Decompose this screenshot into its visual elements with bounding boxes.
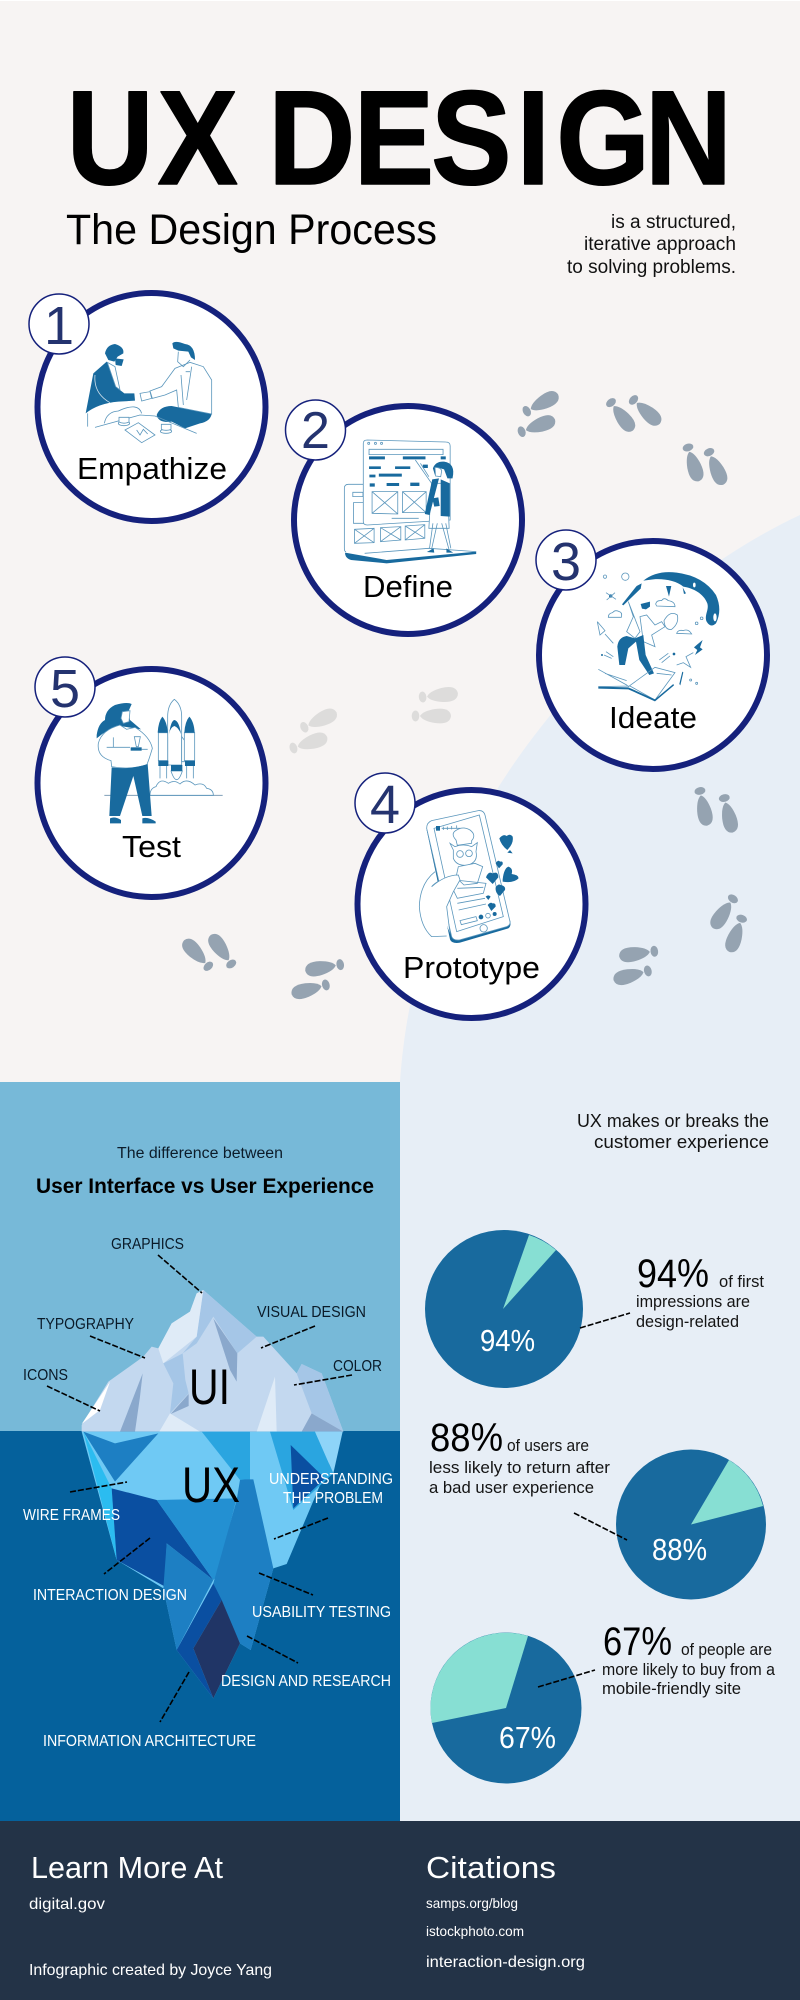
UX labels (23, 1471, 393, 1750)
title: UX DESIGN (67, 64, 732, 213)
iceberg below water (82, 1432, 343, 1698)
badge: 2: 2 (301, 402, 330, 460)
footer: learn more: Infographic created by Joyce Yang (29, 1962, 272, 1979)
heading: user interface vs user experience: User Interface vs User Experience (36, 1175, 374, 1198)
UI labels: ICONS (23, 1367, 68, 1384)
leader line: 88% (574, 1513, 627, 1540)
footprints: faded trail (288, 686, 459, 756)
footer: learn more (29, 1850, 272, 1979)
footer: citations: samps.org/blog (426, 1895, 518, 1911)
intro text (567, 212, 736, 278)
pie chart: 67%: 67% (499, 1720, 556, 1755)
label: Define: Define (363, 569, 453, 604)
icon: phone with hearts (419, 811, 518, 943)
intro text: iterative approach (584, 234, 736, 255)
badge: 3: 3 (551, 532, 581, 592)
stat text: 67%: mobile-friendly site (602, 1680, 741, 1698)
badge: 3 (536, 530, 596, 592)
UX labels: INTERACTION DESIGN (33, 1587, 187, 1604)
stat text: 94%: design-related (636, 1313, 739, 1331)
footer: learn more: digital.gov (29, 1896, 105, 1913)
stat text: 94%: of first (719, 1273, 764, 1291)
pie chart: 67% (430, 1632, 582, 1784)
step 5: Test (35, 657, 266, 897)
subtitle: The Design Process (66, 206, 437, 254)
footer: citations: istockphoto.com (426, 1923, 524, 1939)
panel: statistics (425, 1110, 776, 1784)
UX word: UX (182, 1457, 240, 1513)
heading: UX makes or breaks: customer experience (594, 1131, 769, 1152)
icon: artist painting on a book (597, 572, 719, 701)
stat text: 67%: of people are (681, 1641, 772, 1659)
step 3: Ideate (536, 530, 767, 769)
stat text: 94%: 94% (637, 1252, 709, 1296)
UX labels: UNDERSTANDING (269, 1471, 393, 1488)
footprints: dark trail (179, 388, 750, 1001)
stat text: 88%: 88% (430, 1416, 503, 1460)
step 2: Define (286, 400, 522, 634)
UI labels (23, 1236, 382, 1384)
panel: UI vs UX iceberg (0, 1082, 400, 1821)
dashed leader lines (47, 1255, 352, 1722)
UI labels: COLOR (333, 1358, 382, 1375)
footer: citations (426, 1850, 585, 1971)
stat text: 88% (429, 1416, 611, 1497)
heading: the difference between: The difference between (117, 1145, 283, 1162)
step 1: Empathize (29, 293, 266, 521)
badge: 5: 5 (50, 659, 80, 719)
pie chart: 94%: 94% (480, 1323, 535, 1358)
stat text: 67%: more likely to buy from a (602, 1661, 776, 1679)
label: Empathize: Empathize (77, 451, 227, 486)
intro text: to solving problems. (567, 257, 736, 278)
stat text: 67%: 67% (603, 1620, 672, 1664)
label: Prototype: Prototype (403, 950, 540, 985)
icon: wireframe screens and woman (344, 440, 476, 563)
stat text: 88%: a bad user experience (429, 1479, 594, 1497)
stat text: 88%: less likely to return after (429, 1459, 611, 1477)
leader line: 94% (580, 1313, 630, 1328)
UI labels: GRAPHICS (111, 1236, 184, 1253)
step 4: Prototype (355, 773, 586, 1018)
intro text: is a structured, (611, 212, 736, 233)
stat text: 94% (636, 1252, 764, 1331)
footer (0, 1821, 800, 2000)
label: Test: Test (122, 829, 181, 864)
icon: handshake people (86, 342, 212, 443)
UX labels: DESIGN AND RESEARCH (221, 1673, 391, 1690)
UX labels: THE PROBLEM (283, 1490, 383, 1507)
leader line: 67% (538, 1670, 595, 1687)
badge: 4 (355, 773, 415, 835)
footer: citations: interaction-design.org (426, 1954, 585, 1971)
UX labels: USABILITY TESTING (252, 1604, 391, 1621)
badge: 2 (286, 400, 346, 460)
stat text: 88%: of users are (507, 1437, 589, 1455)
UI word: UI (189, 1359, 230, 1415)
pie chart: 88% (616, 1450, 766, 1600)
badge: 1 (29, 294, 89, 356)
stat text: 94%: impressions are (636, 1293, 750, 1311)
label: Ideate: Ideate (609, 700, 697, 735)
badge: 4: 4 (370, 775, 400, 835)
pie chart: 88%: 88% (652, 1532, 707, 1567)
UX labels: WIRE FRAMES (23, 1507, 120, 1524)
iceberg above water (82, 1290, 343, 1432)
heading: UX makes or breaks: UX makes or breaks the (577, 1110, 769, 1131)
footer: learn more: Learn More At (31, 1850, 223, 1885)
stat text: 67% (602, 1620, 776, 1698)
heading: UX makes or breaks (577, 1110, 769, 1152)
light blue curved background (400, 515, 800, 1821)
icon: woman and rocket (97, 699, 223, 823)
UI labels: VISUAL DESIGN (257, 1304, 366, 1321)
footer: citations: Citations (426, 1850, 556, 1885)
badge: 1: 1 (44, 296, 74, 356)
badge: 5 (35, 657, 95, 719)
UI labels: TYPOGRAPHY (37, 1316, 134, 1333)
UX labels: INFORMATION ARCHITECTURE (43, 1733, 256, 1750)
pie chart: 94% (425, 1230, 583, 1388)
